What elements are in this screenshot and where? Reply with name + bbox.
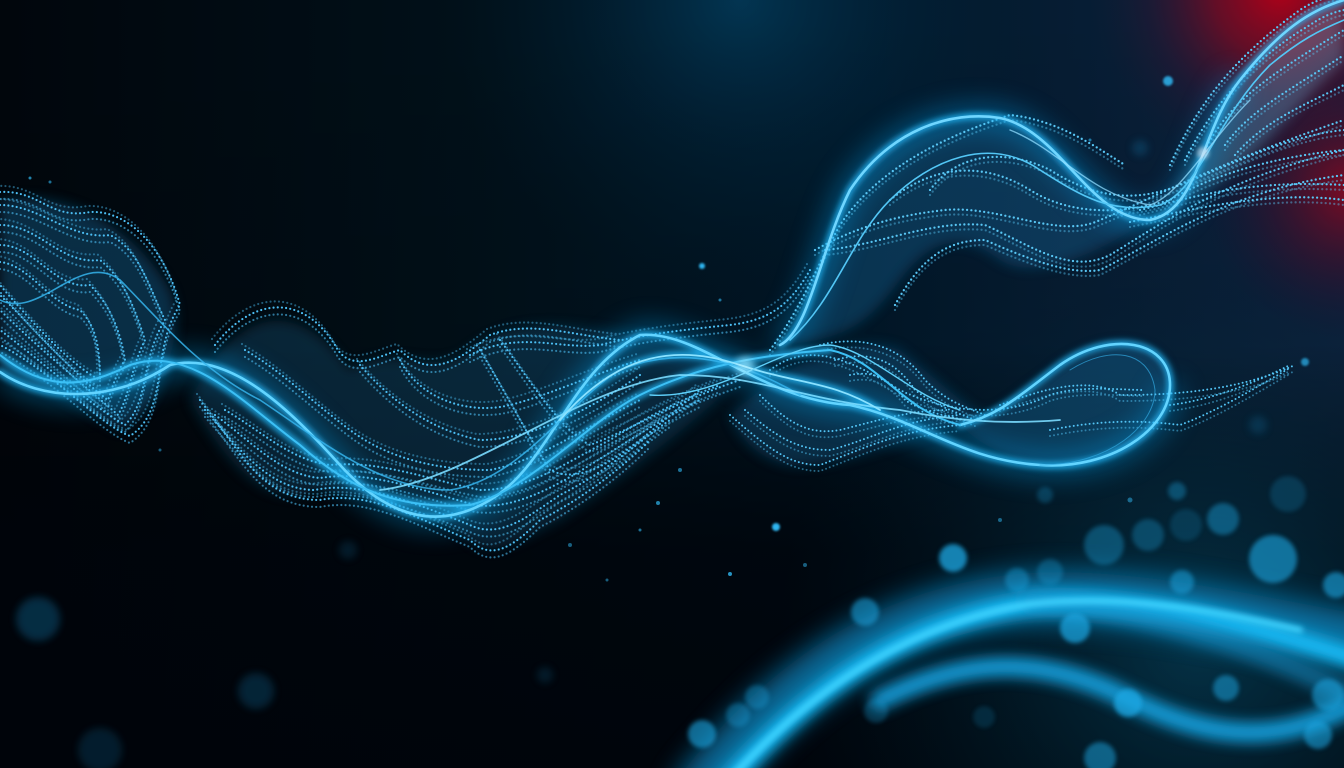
light sparkle at wave crossings <box>736 147 1209 375</box>
small sparkling particles <box>28 76 1309 582</box>
bokeh particles, foreground <box>688 476 1344 768</box>
bright light strands: glow <box>0 0 1344 517</box>
dotted particle mesh: upper wave <box>770 0 1344 355</box>
glow under mid-air wave <box>0 80 1240 517</box>
dotted particle mesh: centre and right loop <box>730 341 1295 471</box>
bright light strands: core <box>0 0 1344 517</box>
dotted particle mesh: left wave <box>0 186 810 557</box>
translucent ribbon sheets <box>0 0 1344 548</box>
bokeh particles, dim left side <box>16 140 1267 768</box>
foreground blurred wave, bottom right <box>700 597 1344 768</box>
